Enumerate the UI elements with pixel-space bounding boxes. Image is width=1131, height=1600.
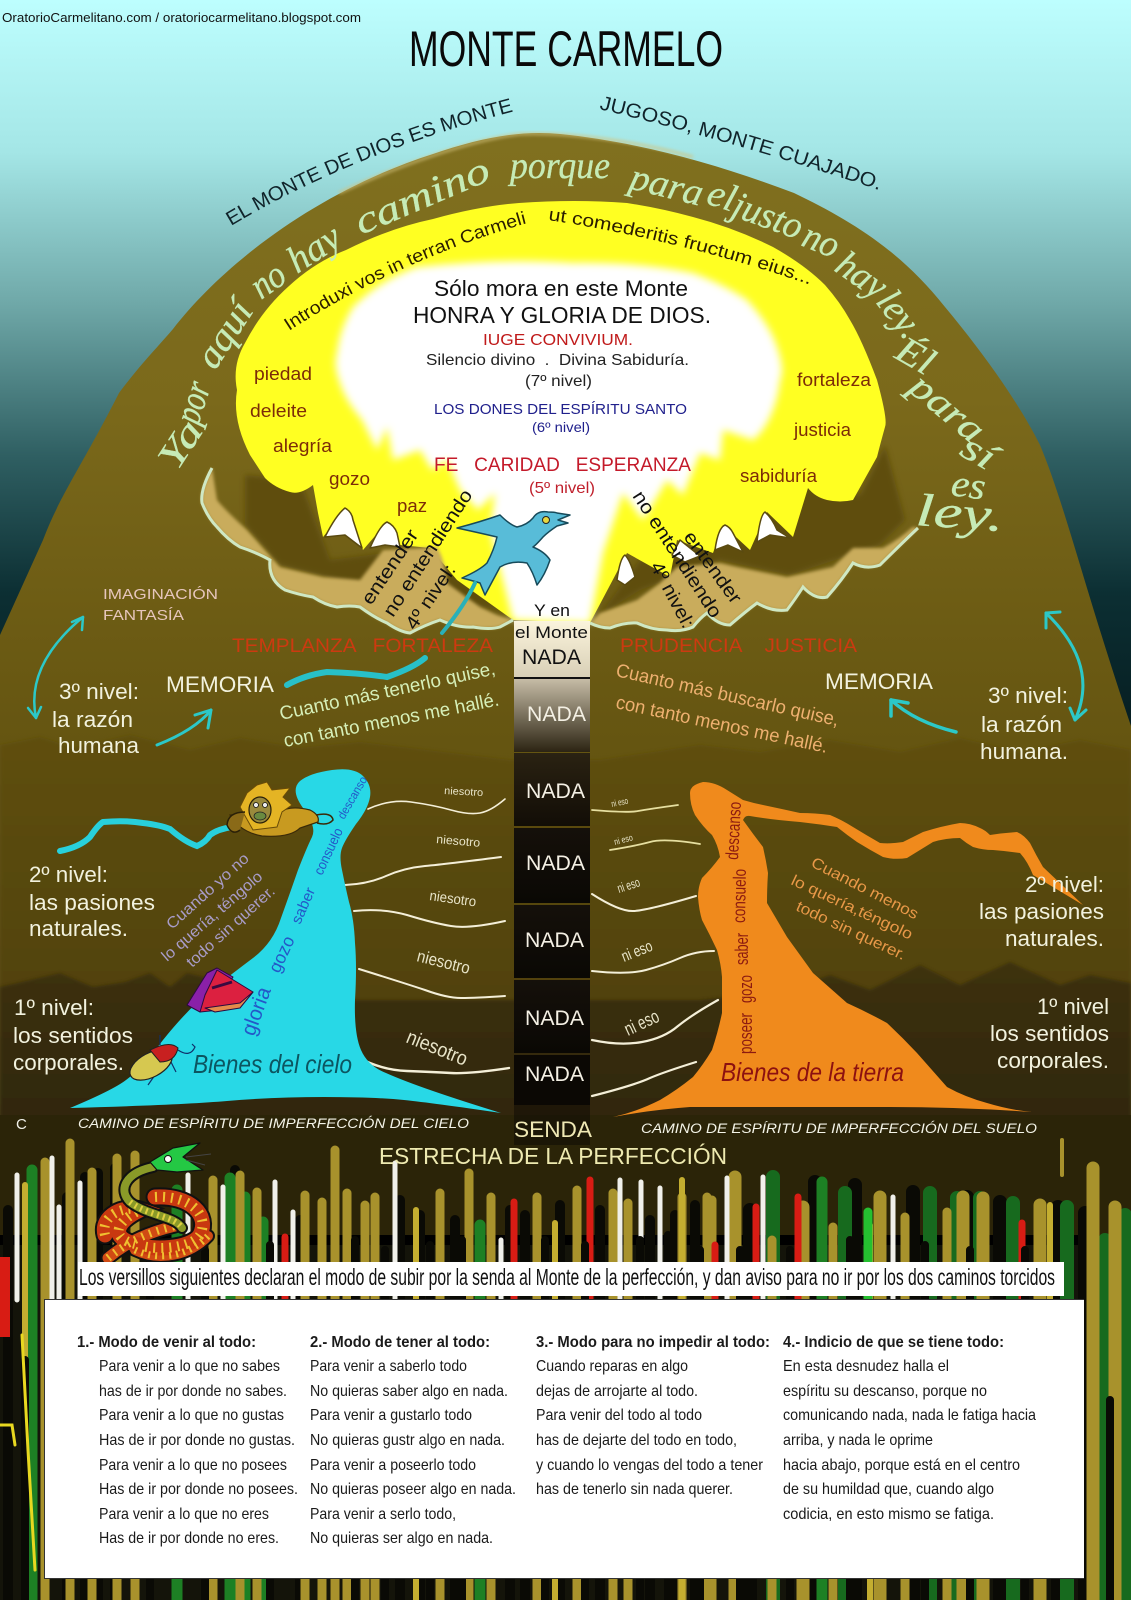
column 4 <box>783 1334 1036 1523</box>
virtues right: fortaleza <box>797 370 872 390</box>
dark foreground hills <box>0 962 1131 1190</box>
arrow: razon to memoria left <box>157 710 211 745</box>
virtues left: gozo <box>329 469 370 489</box>
stream to memoria <box>287 658 425 685</box>
senda: SENDA <box>514 1117 592 1142</box>
first level left: corporales. <box>13 1050 124 1075</box>
column 3: has de tenerlo sin nada querer. <box>536 1481 733 1498</box>
script text along dome: ley. <box>868 282 932 347</box>
column 4: 4.- Indicio de que se tiene todo: <box>783 1334 1004 1351</box>
column labels <box>515 601 588 1086</box>
memoria right: MEMORIA <box>825 669 933 694</box>
column 2: Para venir a saberlo todo <box>310 1358 467 1375</box>
second level right: las pasiones <box>979 899 1104 924</box>
blue words: gloria <box>237 984 276 1039</box>
summit text block <box>413 276 711 497</box>
first level right: corporales. <box>997 1048 1109 1073</box>
red words <box>722 801 756 1054</box>
arrow: right double <box>1046 612 1086 720</box>
second level left: naturales. <box>29 916 128 941</box>
ni eso labels: ni eso <box>615 874 642 896</box>
script text along dome <box>149 145 1008 541</box>
blue words: gozo <box>264 933 299 976</box>
verse left: con tanto menos me hallé. <box>282 690 501 752</box>
column labels: NADA <box>526 852 585 875</box>
cardinal virtues left: TEMPLANZA FORTALEZA <box>232 636 493 657</box>
column labels: NADA <box>525 929 584 952</box>
rotated labels right: 4º nivel: <box>646 558 698 632</box>
virtues right <box>740 370 872 486</box>
wavy lines right <box>592 805 718 1096</box>
blue words: consuelo <box>310 825 346 877</box>
verse right: Cuanto más buscarlo quise, <box>614 660 841 731</box>
column 1: has de ir por donde no sabes. <box>99 1383 287 1400</box>
imaginacion fantasia: IMAGINACIÓN <box>103 586 218 603</box>
script text along dome: hay <box>279 216 349 282</box>
bienes del cielo: Bienes del cielo <box>193 1049 352 1079</box>
script text along dome: para <box>898 362 993 452</box>
column 4: En esta desnudez halla el <box>783 1358 949 1375</box>
icon: butterfly <box>187 968 253 1012</box>
column 4: de su humildad que, cuando algo <box>783 1481 994 1498</box>
estrecha de la perfeccion: ESTRECHA DE LA PERFECCIÓN <box>379 1143 727 1169</box>
column labels: NADA <box>525 1063 584 1086</box>
icon: snake <box>104 1143 211 1258</box>
column 3: Cuando reparas en algo <box>536 1358 688 1375</box>
panel: orange mountain <box>613 782 1083 1117</box>
column labels: el Monte <box>515 623 588 642</box>
ni eso labels: ni eso <box>610 796 629 809</box>
sky background <box>0 0 1131 760</box>
column 1: Para venir a lo que no sabes <box>99 1358 280 1375</box>
panel: cyan mountain <box>60 769 501 1113</box>
camino suelo: CAMINO DE ESPÍRITU DE IMPERFECCIÓN DEL SUELO <box>641 1121 1038 1136</box>
column labels: NADA <box>525 1007 584 1030</box>
mountain silhouette <box>0 133 1131 1200</box>
bottom dark ground <box>0 1115 1131 1235</box>
first level left <box>13 995 133 1075</box>
arrow: razon to memoria right <box>891 700 956 732</box>
latin text left: Introduxi vos in terran Carmeli <box>284 211 526 330</box>
column 2 <box>310 1334 516 1547</box>
second level left: 2º nivel: <box>29 862 108 887</box>
script text along dome: sí <box>954 425 1008 481</box>
script text along dome: el <box>702 172 742 220</box>
rotated labels right: entender <box>679 528 746 608</box>
second level right: naturales. <box>1005 926 1104 951</box>
camino labels: C <box>16 1116 27 1133</box>
column 4: comunicando nada, nada le fatiga hacia <box>783 1407 1036 1424</box>
red words: gozo <box>736 975 756 1003</box>
column labels: NADA <box>526 780 585 803</box>
column 1: Para venir a lo que no eres <box>99 1506 269 1523</box>
script text along dome: ley. <box>914 484 1006 541</box>
title: MONTE CARMELO <box>409 21 723 77</box>
column 1: Para venir a lo que no posees <box>99 1457 287 1474</box>
column 2: No quieras gustr algo en nada. <box>310 1432 505 1449</box>
lower hills <box>0 735 1131 1130</box>
second level left <box>29 862 155 941</box>
verse orange small: todo sin querer. <box>793 898 908 964</box>
ni eso labels: ni eso <box>621 1006 663 1041</box>
left tan ridge <box>202 468 513 633</box>
cardinal virtues right: PRUDENCIA JUSTICIA <box>620 636 857 657</box>
virtues right: sabiduría <box>740 466 818 486</box>
first level right <box>990 994 1109 1073</box>
third level right: humana. <box>980 739 1068 764</box>
verse lavender: todo sin querer. <box>183 883 279 971</box>
script text along dome: aquí <box>187 290 264 376</box>
rotated labels left <box>358 486 477 634</box>
verse left: Cuanto más tenerlo quise, <box>278 659 497 725</box>
column 3: has de dejarte del todo en todo, <box>536 1432 737 1449</box>
third level left: 3º nivel: <box>59 679 139 704</box>
column 2: No quieras poseer algo en nada. <box>310 1481 516 1498</box>
script text along dome: no <box>242 253 294 307</box>
first level left: los sentidos <box>13 1023 133 1048</box>
column 2: Para venir a serlo todo, <box>310 1506 456 1523</box>
latin text right: ut comederitis fructum eius... <box>550 210 809 284</box>
column 4: codicia, en esto mismo se fatiga. <box>783 1506 994 1523</box>
column 2: Para venir a poseerlo todo <box>310 1457 476 1474</box>
red words: saber <box>732 933 752 965</box>
dark ridge behind the yellow dome <box>245 445 905 615</box>
script text along dome: Ya <box>149 412 212 477</box>
summit text block: (7º nivel) <box>525 373 592 390</box>
first level right: 1º nivel <box>1037 994 1109 1019</box>
right tan ridge <box>590 527 918 631</box>
verse orange small: Cuando menos <box>808 854 921 923</box>
script text along dome: justo <box>722 182 809 248</box>
summit text block: LOS DONES DEL ESPÍRITU SANTO <box>434 401 687 418</box>
virtues left: deleite <box>250 401 307 421</box>
second level left: las pasiones <box>29 890 155 915</box>
icon: blue dove <box>457 512 570 595</box>
wavy lines left <box>345 799 509 1073</box>
virtues right: justicia <box>793 420 852 440</box>
summit text block: FE CARIDAD ESPERANZA <box>434 455 691 476</box>
column 3: y cuando lo vengas del todo a tener <box>536 1457 764 1474</box>
column 1: Has de ir por donde no posees. <box>99 1481 298 1498</box>
rotated labels left: no entendiendo <box>380 486 477 621</box>
ni eso labels <box>610 796 663 1041</box>
arrow: left double <box>28 617 83 718</box>
icon: beetle <box>125 1035 195 1086</box>
niesotro labels: niesotro <box>436 832 481 850</box>
rotated labels right <box>628 487 746 632</box>
ni eso labels: ni eso <box>619 938 655 966</box>
verse lavender <box>158 850 279 971</box>
column 2: No quieras saber algo en nada. <box>310 1383 508 1400</box>
imaginacion fantasia <box>103 586 218 624</box>
column 1: Has de ir por donde no eres. <box>99 1530 279 1547</box>
summit text block: HONRA Y GLORIA DE DIOS. <box>413 302 711 328</box>
niesotro labels <box>403 785 484 1071</box>
column 4: espíritu su descanso, porque no <box>783 1383 987 1400</box>
imaginacion fantasia: FANTASÍA <box>103 607 184 624</box>
third level right: la razón <box>981 712 1062 737</box>
blue words: descanso <box>334 774 370 822</box>
column: camino de nada <box>514 621 590 1145</box>
memoria left: MEMORIA <box>166 672 274 697</box>
niesotro labels: niesotro <box>403 1026 471 1071</box>
column 4: arriba, y nada le oprime <box>783 1432 933 1449</box>
column labels: Y en <box>534 601 570 620</box>
snow peaks <box>325 508 790 585</box>
rotated labels right: no entendiendo <box>628 487 725 622</box>
third level left: la razón <box>52 707 133 732</box>
second level right <box>979 872 1104 951</box>
virtues left: piedad <box>254 364 312 384</box>
verse orange small <box>788 854 921 964</box>
first level right: los sentidos <box>990 1021 1109 1046</box>
panel: versillos columns <box>44 1299 1084 1579</box>
third level left: humana <box>58 733 140 758</box>
script text along dome: para <box>623 155 708 215</box>
script text along dome: porque <box>507 145 610 187</box>
column 3: dejas de arrojarte al todo. <box>536 1383 698 1400</box>
third level right: 3º nivel: <box>988 683 1068 708</box>
column 1: Has de ir por donde no gustas. <box>99 1432 295 1449</box>
column labels: NADA <box>527 703 586 726</box>
column 1: Para venir a lo que no gustas <box>99 1407 284 1424</box>
script text along dome: es <box>949 462 988 509</box>
ni eso labels: ni eso <box>613 832 634 847</box>
summit text block: IUGE CONVIVIUM. <box>483 332 633 349</box>
cyan stream <box>60 821 232 851</box>
mountain summit highlight <box>339 134 693 193</box>
yellow dome <box>236 201 886 623</box>
summit text block: (6º nivel) <box>532 419 590 435</box>
camino cielo: CAMINO DE ESPÍRITU DE IMPERFECCIÓN DEL CIELO <box>78 1116 470 1131</box>
curved heading left: EL MONTE DE DIOS ES MONTE <box>226 98 513 226</box>
first level left: 1º nivel: <box>14 995 94 1020</box>
column 3 <box>536 1334 770 1498</box>
summit text block: (5º nivel) <box>529 480 595 497</box>
dove tail stream <box>442 583 475 633</box>
verse orange small: lo quería,téngolo <box>788 872 915 943</box>
script text along dome: no <box>797 214 846 267</box>
rotated labels left: 4º nivel: <box>402 561 461 634</box>
summit text block: Silencio divino . Divina Sabiduría. <box>426 352 689 369</box>
niesotro labels: niesotro <box>444 785 484 799</box>
icon: lion <box>227 782 333 836</box>
red words: consuelo <box>729 869 750 923</box>
script text along dome: Él <box>888 328 942 384</box>
blue words: saber <box>288 885 319 927</box>
rotated labels left: entender <box>358 525 424 609</box>
verse lavender: lo quería, téngolo <box>158 868 266 965</box>
grass field <box>0 1140 1131 1600</box>
column labels: NADA <box>522 646 581 669</box>
summit text block: Sólo mora en este Monte <box>434 276 688 301</box>
niesotro labels: niesotro <box>415 946 472 978</box>
script text along dome: por <box>166 376 220 431</box>
attribution: OratorioCarmelitano.com / oratoriocarmelitano.blogspot.com <box>2 10 361 25</box>
second level right: 2º nivel: <box>1025 872 1104 897</box>
white glory centre <box>336 261 782 623</box>
third level right <box>980 683 1068 764</box>
red words: descanso <box>722 801 745 860</box>
virtues left: alegría <box>273 436 333 456</box>
column 3: 3.- Modo para no impedir al todo: <box>536 1334 770 1351</box>
column 1: 1.- Modo de venir al todo: <box>77 1334 256 1351</box>
third level left <box>52 679 140 758</box>
curved heading right: JUGOSO, MONTE CUAJADO. <box>600 96 878 190</box>
virtues left <box>250 364 427 516</box>
blue words <box>237 774 370 1039</box>
column 2: Para venir a gustarlo todo <box>310 1407 472 1424</box>
script text along dome: camino <box>348 149 496 243</box>
verse lavender: Cuando yo no <box>163 850 253 933</box>
column 4: hacia abajo, porque está en el centro <box>783 1457 1020 1474</box>
column 1 <box>77 1334 298 1547</box>
column 2: 2.- Modo de tener al todo: <box>310 1334 490 1351</box>
script text along dome: hay <box>828 243 895 308</box>
virtues left: paz <box>397 496 427 516</box>
column 3: Para venir del todo al todo <box>536 1407 702 1424</box>
niesotro labels: niesotro <box>429 887 478 910</box>
red words: poseer <box>736 1013 756 1054</box>
verse right: con tanto menos me hallé. <box>614 692 830 758</box>
bienes de la tierra: Bienes de la tierra <box>721 1057 904 1087</box>
column 2: No quieras ser algo en nada. <box>310 1530 493 1547</box>
